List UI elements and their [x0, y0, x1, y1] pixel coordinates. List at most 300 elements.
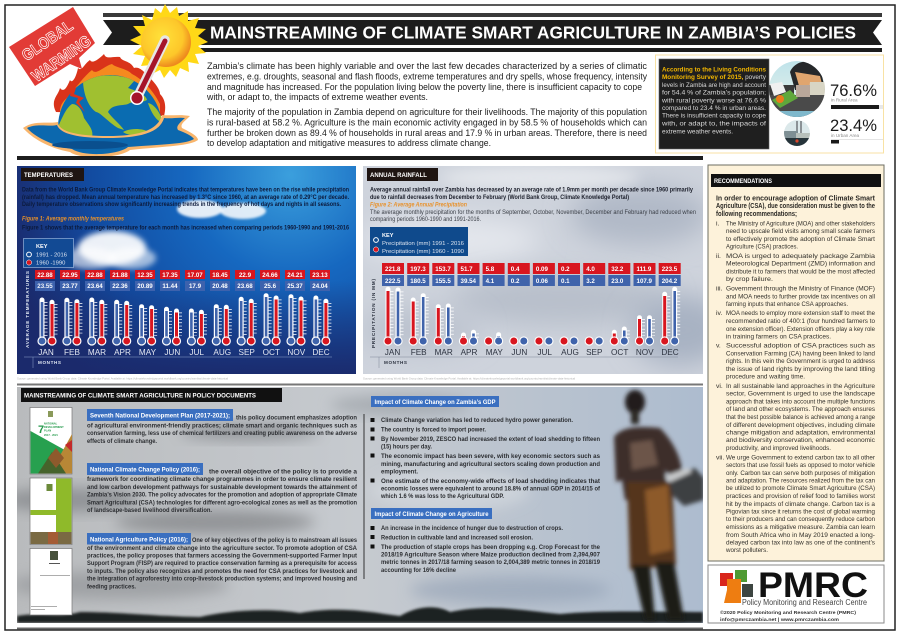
- impact on agriculture: Impact of Climate Change on Agriculture: [374, 511, 489, 518]
- impact on GDP: (15) hours per day.: [381, 444, 432, 450]
- policy: national climate change policy: the overall objective of the policy is to provide a: [209, 468, 357, 475]
- thermometers MAR: [85, 270, 106, 357]
- policy: national climate change policy: of landscape-based livelihood diversification.: [87, 507, 212, 514]
- heading: [367, 168, 438, 181]
- stat: rural poverty: in Rural Area: [831, 98, 858, 102]
- recommendation vi: sector, Government is urged to use the landscape: [726, 390, 875, 398]
- rain MAY: [483, 263, 505, 357]
- recommendation i: Agriculture (CSA) practices.: [726, 244, 798, 251]
- rain MAR: 155.5: [435, 278, 451, 285]
- axis lines: [370, 357, 678, 368]
- recommendation i: to effectively promote the adoption of Climate Smart: [726, 236, 875, 243]
- thermometers DEC: 23.13: [312, 272, 328, 279]
- impact on agriculture: Reduction in cultivable land and increased soil erosion.: [381, 534, 533, 542]
- impact on GDP: [370, 396, 601, 500]
- illustration: global warming: GLOBAL: [19, 18, 77, 65]
- thermometers MAR: 22.88: [87, 272, 103, 279]
- description: Figure 2: Average Annual Precipitation: [370, 202, 467, 208]
- recommendation i: The Ministry of Agriculture (MOA) and other stakeholders: [726, 220, 876, 228]
- policy: national climate change policy: National Climate Change Policy (2016);: [90, 466, 200, 474]
- impact on GDP: One estimate of the economy-wide effects of load shedding indicates that: [381, 478, 601, 485]
- rain JUN: JUN: [511, 348, 527, 357]
- rain NOV: 111.9: [636, 266, 652, 273]
- thermometers AUG: [210, 270, 231, 357]
- intro text: with, or adapt to, the impacts of extreme weather events.: [206, 92, 428, 102]
- x axis label: MONTHS: [384, 360, 407, 365]
- key: KEY: [382, 233, 394, 239]
- recommendation iv: MOA needs to employ more extension staff to meet the: [726, 310, 875, 317]
- description: due to rainfall decreases from December to February (World Bank Group, Climate Knowledge Portal): [370, 194, 629, 201]
- thermometers MAY: 12.35: [137, 272, 153, 279]
- rain JUN: 0.4: [511, 266, 520, 273]
- recommendation iii: Government through the Ministry of Finance (MOF): [726, 286, 875, 293]
- thermometers NOV: [285, 270, 306, 357]
- stat: rural poverty: [830, 81, 883, 109]
- policy: national agriculture policy: National Agriculture Policy (2016);: [90, 536, 188, 544]
- intro: following recommendations;: [716, 211, 797, 218]
- stat: rural poverty: 76.6%: [830, 81, 877, 100]
- recommendation vi: vi.: [716, 383, 723, 390]
- description: [22, 186, 349, 232]
- recommendation vi: of different development objectives, including climate: [726, 422, 875, 429]
- rain MAR: MAR: [435, 348, 453, 357]
- description: (rainfall) has dropped. Mean annual temperature has increased by 1.3°C since 1960, at an average rate of 0.29°C per decade.: [22, 193, 349, 201]
- recommendation iv: in training farmers on CSA practices.: [726, 333, 831, 340]
- panel: PMRC logo and contacts: [708, 565, 884, 623]
- recommendation ii: distribute it to farmers that would be the most affected: [726, 268, 875, 275]
- heading: [21, 168, 84, 181]
- thermometers JUL: 17.07: [187, 272, 203, 279]
- impact on GDP: Impact of Climate Change on Zambia’s GDP: [374, 399, 496, 406]
- key: KEY: [36, 244, 48, 250]
- rain FEB: 180.5: [410, 278, 426, 285]
- intro text: [206, 61, 648, 148]
- rain JUL: 0.06: [536, 278, 549, 285]
- farmer: [614, 390, 704, 620]
- policy: national climate change policy: Smart Agricultural (CSA) technologies for different agro-ecological zones as well as the promotion: [87, 499, 357, 506]
- intro: [716, 196, 876, 218]
- policy: seventh national development plan: Seventh National Development Plan (2017-2021);: [90, 412, 230, 420]
- source note: temperatures: Source: generated using World Bank Group data: Climate Knowledge Portal. Available at: https://climateknowledgeportal.worldbank.org/country/zambia/climate-data-historical: [17, 376, 228, 380]
- thermometers MAY: MAY: [139, 348, 157, 357]
- poverty text box: with rural poverty worse at 76.6 %: [661, 97, 766, 104]
- rain JAN: JAN: [385, 348, 400, 357]
- thermometers APR: 21.88: [112, 272, 128, 279]
- rain MAY: MAY: [486, 348, 503, 357]
- impact on agriculture: An increase in the incidence of hunger due to destruction of crops.: [381, 525, 563, 532]
- rain FEB: FEB: [411, 348, 427, 357]
- intro: In order to encourage adoption of Climate Smart: [716, 196, 876, 202]
- description: The average monthly precipitation for the months of September, October, November, December and February had reduced when: [370, 209, 696, 216]
- photo background: sky, horizon and farmer: [0, 387, 704, 623]
- heading: [711, 174, 881, 187]
- policy: national climate change policy: framework for coordinating climate change programmes in order to ensure climate resilient: [87, 476, 358, 483]
- recommendation iii: iii.: [716, 286, 723, 293]
- recommendation iv: one extension officer). Extension officers play a key role: [726, 326, 875, 333]
- recommendation vii: sectors that use fossil fuels as opposed to motor vehicle: [726, 462, 875, 469]
- rain DEC: 204.2: [662, 278, 678, 285]
- recommendation vii: from South Africa who in May 2019 enacted a long-: [726, 532, 875, 539]
- description: Daily temperature observations show significantly increasing trends in the frequency of hot days and nights in all seasons.: [22, 201, 341, 208]
- document cover: seventh national development plan: PLAN: [44, 428, 51, 432]
- impact on GDP: economic losses were equivalent to around 18.8% of annual GDP in 2014/15 of: [381, 486, 601, 492]
- heading: [21, 388, 282, 402]
- recommendation iii: and MOA needs to further provide tax incentives on all: [726, 293, 875, 300]
- rain OCT: 32.2: [611, 266, 624, 273]
- policy: national agriculture policy: feeding practices.: [87, 584, 136, 590]
- intro text: The majority of the population in Zambia depend on agriculture for their livelihoods. The majority of this population: [207, 107, 647, 117]
- thermometers FEB: FEB: [64, 348, 80, 357]
- icon: rural scene: [769, 61, 825, 117]
- recommendation vi: that the best possible balance is achieved among a range: [726, 414, 875, 421]
- rain FEB: 197.3: [410, 266, 426, 273]
- rain OCT: OCT: [611, 348, 628, 357]
- recommendation vi: approach that takes into account the multiple functions: [726, 398, 876, 406]
- policy: national agriculture policy: Support Program (FISP) are required to practice conservation farming as a prerequisite for access: [87, 560, 357, 567]
- policy: national agriculture policy: of the environment and climate change into the agriculture sector. To promote adoption of CSA: [87, 545, 357, 552]
- key: Precipitation (mm) 1960 - 1090: [382, 249, 465, 255]
- panel: temperatures: [17, 166, 356, 374]
- divider between policy columns: [364, 414, 365, 579]
- globe: [58, 75, 162, 137]
- panel: poverty statistics: [656, 55, 884, 153]
- impact on GDP: Climate Change variation has led to reduced hydro power generation.: [381, 417, 573, 424]
- thermometers JUL: 17.9: [189, 283, 202, 290]
- intro text: and magnitude has increased. For the population living below the poverty line, there is insufficient capacity to cope: [207, 82, 642, 92]
- impact on agriculture: accounting for 16% decline: [381, 567, 456, 574]
- thermometers AUG: 20.48: [212, 283, 228, 290]
- poverty text box: According to the Living Conditions: [662, 66, 766, 73]
- impact on GDP: The economic impact has been severe, with key economic sectors such as: [381, 453, 600, 460]
- warning sign: [9, 7, 95, 86]
- policy: national climate change policy: and low carbon development pathways for sustainable development towards the attainment of: [87, 484, 358, 491]
- recommendation vii: and adaptation. The resources realized from the tax can: [726, 478, 875, 484]
- rain NOV: NOV: [636, 348, 654, 357]
- intro text: further be broken down as 89.4 % of households in rural areas and 17.9 % in urban areas. Therefore, there is need: [207, 128, 647, 138]
- rain SEP: [583, 263, 605, 357]
- thermometers OCT: 25.6: [264, 283, 277, 290]
- poverty text box: for 54.4 % of Zambia’s population;: [662, 90, 766, 97]
- document cover: seventh national development plan: DEVELOPMENT: [44, 425, 64, 429]
- recommendation vii: Pigovian tax since it returns the cost of global warming: [726, 508, 875, 516]
- rain AUG: AUG: [561, 348, 579, 357]
- impact on GDP: The country is forced to import power.: [381, 426, 486, 434]
- recommendation v: the issue of land rights by improving the land titling: [726, 366, 875, 373]
- policy: national climate change policy: Zambia’s Vision 2030. The policy advocates for the promotion and adoption of appropriate Climate: [87, 492, 357, 499]
- impact on GDP: which 1.6 % was loss to the Agricultural GDP.: [380, 493, 504, 500]
- crack: [69, 84, 85, 112]
- thermometers MAY: [135, 270, 157, 357]
- title banner: MAINSTREAMING OF CLIMATE SMART AGRICULTURE IN ZAMBIA’S POLICIES: [210, 22, 856, 42]
- rain MAR: 153.7: [435, 266, 451, 273]
- thermometers NOV: 24.21: [287, 272, 303, 279]
- rain APR: [458, 263, 480, 357]
- rain JUN: 0.2: [511, 278, 520, 285]
- recommendation v: [716, 343, 876, 380]
- recommendation vii: practices and provision of relief food to families worst: [726, 493, 875, 500]
- heading: RECOMMENDATIONS: [714, 178, 772, 185]
- rain NOV: 107.9: [636, 278, 653, 285]
- recommendation vii: [716, 454, 876, 554]
- rain SEP: SEP: [586, 348, 603, 357]
- thermometers MAY: 20.89: [137, 283, 153, 290]
- rain JUL: 0.09: [536, 266, 549, 273]
- recommendation vii: only. Carbon tax can serve both purposes of mitigation: [726, 470, 875, 477]
- thermometers NOV: NOV: [287, 348, 306, 357]
- thermometers JUN: 17.35: [162, 272, 178, 279]
- thermometers MAR: MAR: [88, 348, 106, 357]
- thermometers SEP: 22.9: [239, 272, 252, 279]
- stat: urban poverty: [830, 116, 883, 144]
- document cover: national agriculture policy: [30, 548, 72, 615]
- document cover: seventh national development plan: NATIONAL: [44, 422, 58, 426]
- poverty text box: Monitoring Survey of 2015, poverty: [662, 74, 767, 81]
- rain MAR: [432, 263, 454, 357]
- rain AUG: [558, 263, 580, 357]
- contact details: info@pmrczambia.net | www.pmrczambia.com: [720, 617, 839, 623]
- document cover: national climate change policy: [30, 478, 72, 544]
- rain DEC: DEC: [661, 348, 679, 357]
- panel: recommendations: [708, 165, 884, 561]
- logo mark: [720, 570, 753, 603]
- rain APR: APR: [461, 348, 478, 357]
- recommendation i: [716, 220, 876, 251]
- temperature background: [17, 166, 356, 374]
- thermometers DEC: DEC: [312, 348, 330, 357]
- recommendation vii: delayed carbon tax into law as one of the continent’s: [726, 540, 876, 546]
- source note: rainfall: Source: generated using World Bank Group data: Climate Knowledge Portal. Available at: https://climateknowledgeportal.worldbank.org/country/zambia/climate-data-historical: [363, 376, 575, 380]
- thermometers NOV: 25.37: [287, 283, 303, 290]
- icon: urban scene: [784, 120, 810, 146]
- illustration: global warming: WARMING: [29, 33, 95, 86]
- policy: national agriculture policy: the integration of agroforestry into crop-livestock production systems; and improved housing and: [87, 576, 357, 582]
- sun: [130, 4, 208, 78]
- thermometer: [137, 40, 165, 98]
- recommendation i: i.: [716, 220, 720, 228]
- recommendation ii: MOA is urged to adequately package Zambia: [726, 253, 875, 260]
- description: [370, 186, 696, 223]
- recommendation v: Conservation Farming (CA) having been linked to land: [726, 350, 875, 357]
- thermometers JUL: JUL: [189, 348, 204, 357]
- policy: national climate change policy: [87, 463, 358, 514]
- rain MAY: 5.8: [486, 266, 495, 273]
- recommendation vi: and biodiversity conservation, enhanced economic: [726, 437, 876, 444]
- flames: [54, 54, 165, 116]
- thermometers APR: [110, 270, 131, 357]
- recommendation vii: to their producers and can consequently reduce carbon: [726, 516, 875, 523]
- thermometers JUN: JUN: [164, 348, 180, 357]
- impact on GDP: employment.: [381, 468, 418, 476]
- thermometers AUG: 18.45: [212, 272, 228, 279]
- recommendation vii: worst polluters.: [725, 547, 768, 554]
- recommendation vii: We urge Government to extend carbon tax to all other: [726, 454, 876, 462]
- recommendation vii: be utilized to promote Climate Smart Agriculture (CSA): [726, 485, 875, 492]
- poverty text box: There is insufficient capacity to cope: [662, 113, 767, 120]
- intro text: to develop adaptation and mitigative measures to address climate change.: [207, 138, 491, 148]
- rain FEB: [407, 263, 429, 357]
- poverty text box: levels in Zambia are high and account: [662, 82, 766, 89]
- rain APR: 51.7: [460, 266, 473, 273]
- poverty text box: compared to 23.4 % in urban areas.: [662, 105, 766, 112]
- poverty text box: extreme weather events.: [662, 128, 733, 135]
- intro text: Zambia’s climate has been highly variable and over the last few decades characterized by a series of climatic: [207, 61, 648, 71]
- thermometers APR: 22.36: [112, 283, 128, 290]
- policy: seventh national development plan: effects of climate change.: [87, 438, 157, 445]
- rain JUL: JUL: [537, 348, 552, 357]
- recommendation v: Successful adoption of CSA practices such as: [726, 343, 876, 350]
- continents: [58, 75, 163, 137]
- thermometers OCT: OCT: [263, 348, 280, 357]
- thermometers MAR: 23.64: [87, 283, 103, 290]
- recommendation ii: Meteorological Department (ZMD) information and: [726, 261, 875, 268]
- poverty text box: [659, 59, 769, 149]
- description: Data from the World Bank Group Climate Knowledge Portal indicates that temperatures have been on the rise while precipitation: [22, 186, 349, 194]
- key: [24, 238, 74, 268]
- document cover: seventh national development plan: 2017 - 2021: [44, 433, 58, 437]
- recommendation ii: ii.: [716, 253, 721, 260]
- rain DEC: [659, 263, 681, 357]
- heading: MAINSTREAMING OF CLIMATE SMART AGRICULTURE IN POLICY DOCUMENTS: [24, 392, 257, 400]
- thermometers FEB: 23.77: [62, 283, 78, 290]
- thermometers SEP: 23.68: [237, 283, 253, 290]
- recommendation vi: change mitigation and adaptation, environmental: [726, 430, 875, 436]
- impact on GDP: By November 2019, ZESCO had increased the extent of load shedding to fifteen: [381, 436, 600, 443]
- rain APR: 39.54: [460, 278, 477, 285]
- policy: national agriculture policy: One of key objectives of the policy is to mainstream all issues: [192, 537, 357, 544]
- thermometers JUN: 11.44: [162, 283, 178, 290]
- rain AUG: 0.2: [561, 266, 570, 273]
- thermometers DEC: 24.04: [312, 283, 328, 290]
- recommendation ii: by crop failure.: [726, 276, 773, 283]
- policy: seventh national development plan: of agricultural environment-friendly practices; climate smart and organic techniques such as: [87, 422, 357, 429]
- thermometers SEP: SEP: [239, 348, 255, 357]
- key: [370, 227, 468, 256]
- policy: national agriculture policy: to inputs. The policy also recognizes and promotes the need for CSA practices for livestock and: [87, 568, 357, 575]
- axis lines: [24, 357, 332, 368]
- rain NOV: [634, 263, 656, 357]
- rain OCT: 23.0: [611, 278, 624, 285]
- x axis label: MONTHS: [38, 360, 61, 365]
- thermometers APR: APR: [114, 348, 131, 357]
- rain MAY: 4.1: [486, 278, 495, 285]
- recommendation vi: [716, 383, 876, 452]
- panel: policy documents: [0, 387, 704, 623]
- impact on agriculture: [370, 508, 600, 574]
- key: Precipitation (mm) 1991 - 2016: [382, 241, 465, 247]
- rain JUL: [533, 263, 555, 357]
- copyright: ©2020 Policy Monitoring and Research Centre (PMRC): [720, 609, 856, 616]
- stat: urban poverty: 23.4%: [830, 116, 877, 135]
- recommendation iii: farming inputs that enhance CSA approaches.: [726, 301, 848, 308]
- policy: national agriculture policy: practices, the policy proposes that farmers accessing the Government-supported Farmer Input: [87, 552, 358, 560]
- logo wordmark: PMRC: [758, 566, 868, 605]
- organisation name: Policy Monitoring and Research Centre: [742, 598, 867, 607]
- rain JAN: 222.5: [385, 278, 401, 285]
- rain OCT: [608, 263, 630, 357]
- policy: seventh national development plan: this policy document emphasizes adoption: [236, 414, 357, 422]
- recommendation vii: emissions as a mitigative measure. Zambia can learn: [726, 524, 875, 531]
- thermometers OCT: [260, 270, 281, 357]
- description: Figure 1 shows that the average temperature for each month has increased when comparing periods 1960-1990 and 1991-2016: [22, 224, 349, 232]
- stat: urban poverty: in Urban Area: [831, 133, 860, 138]
- section rule top: [17, 156, 703, 160]
- key: 1991 - 2016: [36, 252, 67, 258]
- illustration: global warming: [9, 4, 208, 157]
- thermometers JAN: 22.88: [37, 272, 53, 279]
- thermometers FEB: 22.95: [62, 272, 78, 279]
- y axis label: AVERAGE TEMPERATURES: [25, 271, 30, 348]
- poverty text box: with, or adapt to, the impacts of: [661, 120, 766, 127]
- section rule middle: [17, 384, 703, 386]
- rain SEP: 3.2: [586, 278, 595, 285]
- thermometers JUL: [185, 270, 206, 357]
- recommendation iii: [716, 286, 875, 308]
- recommendation vii: hit by the impacts of climate change. Carbon tax is a: [726, 501, 875, 508]
- recommendation v: rights. In this vein the Government is urged to address: [726, 358, 876, 365]
- document cover: seventh national development plan: 7: [38, 424, 44, 436]
- recommendation v: procedure and waiting time.: [726, 374, 805, 380]
- title banner: [103, 13, 882, 52]
- heading: TEMPERATURES: [24, 172, 74, 179]
- impact on agriculture: metric tonnes in 2017/18 farming season to 2,004,389 metric tonnes in 2018/19: [381, 559, 600, 566]
- thermometers SEP: [235, 270, 256, 357]
- thermometers JAN: 23.55: [37, 283, 53, 290]
- recommendation iv: iv.: [716, 310, 722, 317]
- policy: national agriculture policy: [87, 533, 358, 590]
- recommendation iv: [716, 310, 875, 340]
- recommendation iv: recommended ratio of 400:1 (four hundred farmers to: [726, 318, 875, 325]
- section rule bottom: [17, 628, 703, 630]
- thermometers JAN: JAN: [38, 348, 54, 357]
- thermometers JAN: [35, 270, 57, 357]
- rain AUG: 0.1: [561, 278, 570, 285]
- thermometers JUN: [160, 270, 181, 357]
- impact on agriculture: The production of staple crops has been dropping e.g. Crop Forecast for the: [381, 544, 600, 551]
- thermometers AUG: AUG: [213, 348, 231, 357]
- recommendation i: need to upscale field visits among small scale farmers: [726, 228, 876, 235]
- document cover: seventh national development plan: [30, 408, 72, 474]
- description: Average annual rainfall over Zambia has decreased by an average rate of 1.9mm per month per decade since 1960 primarily: [370, 186, 693, 194]
- rain JAN: [382, 263, 404, 357]
- rain JUN: [508, 263, 530, 357]
- policy: seventh national development plan: [87, 409, 357, 445]
- intro text: extremes, e.g. droughts, seasonal and flash floods, extreme temperatures and dry spells, whose frequency, intensity: [207, 72, 648, 82]
- recommendation vi: productivity, and improved livelihoods.: [726, 445, 831, 452]
- panel: annual rainfall: [360, 166, 730, 374]
- description: Figure 1: Average monthly temperatures: [22, 216, 124, 222]
- rain JAN: 221.8: [385, 266, 401, 273]
- thermometers FEB: [60, 270, 82, 357]
- thermometers DEC: [310, 270, 330, 357]
- y axis label: PRECIPITATION (IN MM): [371, 279, 376, 348]
- key: 1960 -1990: [36, 260, 65, 266]
- recommendation ii: [716, 253, 875, 283]
- impact on agriculture: 2018/19 Agriculture Season where Maize production declined from 2,394,907: [381, 552, 600, 558]
- heading: ANNUAL RAINFALL: [370, 172, 427, 179]
- rain SEP: 4.0: [586, 266, 595, 273]
- impact on GDP: mining, manufacturing and agricultural sectors scaling down production and: [381, 461, 600, 468]
- recommendation v: v.: [716, 343, 721, 350]
- rain DEC: 223.5: [662, 266, 678, 273]
- policy: seventh national development plan: conservation farming, less use of chemical fertilizers and creating public awareness on the adverse: [87, 430, 357, 437]
- intro text: is rural-based at 58.2 %. Agriculture is the main economic activity engaged in by 58.5 % of households which can: [207, 118, 647, 128]
- puddle: [23, 115, 198, 157]
- thermometers OCT: 24.66: [262, 272, 278, 279]
- recommendation vi: In all sustainable land approaches in the Agriculture: [726, 383, 875, 390]
- recommendation vi: of land and other ecosystems. The approach ensures: [726, 406, 876, 413]
- rainfall background: [360, 166, 730, 374]
- recommendation vii: vii.: [716, 454, 724, 462]
